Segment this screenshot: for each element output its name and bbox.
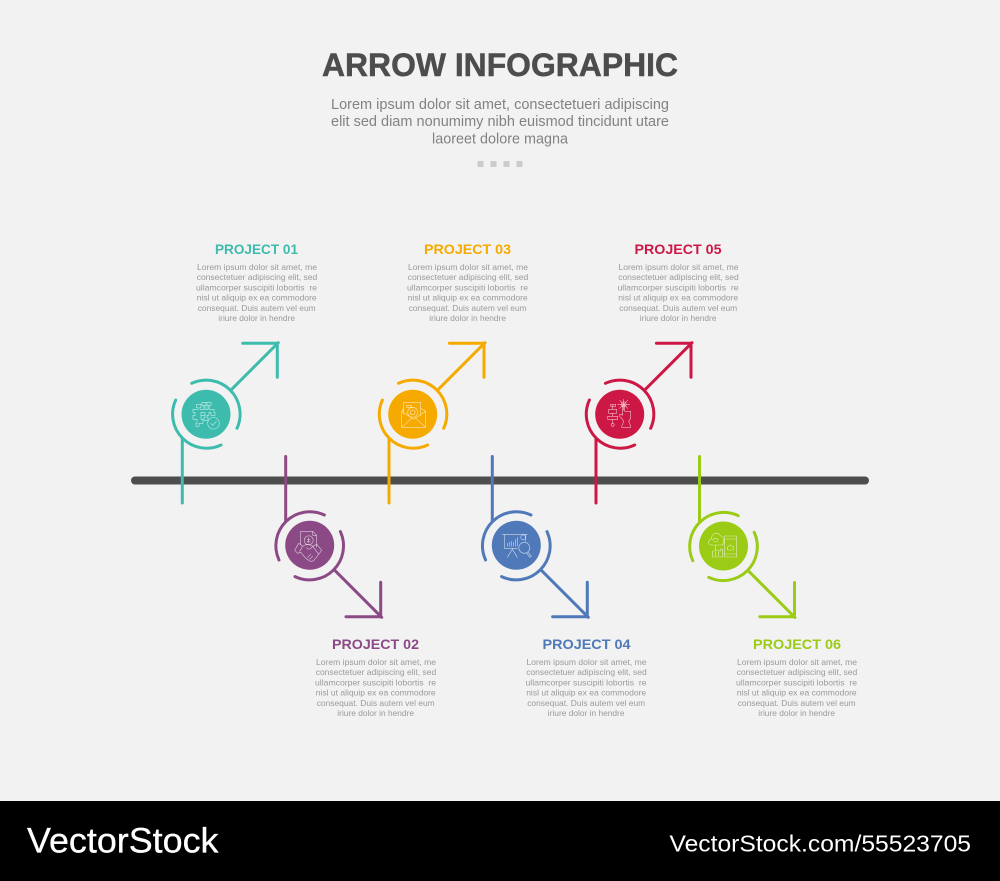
project 05 text block: nisl ut aliquip ex ea commodore: [618, 293, 738, 303]
project 02 marker: [276, 456, 382, 617]
project 03 marker: [379, 343, 485, 503]
footer logo: VectorStock: [27, 822, 219, 861]
subtitle text block: laoreet dolore magna: [432, 130, 569, 148]
project 01 text block: iriure dolor in hendre: [218, 313, 295, 323]
project 04 text block: Lorem ipsum dolor sit amet, me: [526, 657, 647, 667]
project 03 text block: iriure dolor in hendre: [429, 313, 506, 323]
timeline bar: [135, 476, 865, 484]
project 01 text block: consequat. Duis autem vel eum: [198, 303, 316, 313]
project 02 text block: Lorem ipsum dolor sit amet, me: [316, 657, 436, 667]
project 04 text block: consectetuer adipiscing elit, sed: [526, 667, 647, 677]
subtitle text block: [331, 96, 669, 148]
project 05 marker: [586, 343, 692, 503]
panel: project 01: [173, 241, 318, 503]
icon: presentation board with magnifier: [502, 534, 527, 557]
panel: project 05: [586, 241, 739, 503]
project 03 text block: [407, 262, 529, 323]
project 02 text block: nisl ut aliquip ex ea commodore: [316, 688, 436, 698]
project 04 heading: PROJECT 04: [542, 636, 631, 652]
project 05 text block: Lorem ipsum dolor sit amet, me: [618, 262, 739, 272]
project 05 text block: consequat. Duis autem vel eum: [619, 303, 737, 313]
project 06 marker: [690, 456, 795, 618]
project 04 marker: [482, 456, 588, 617]
subtitle text block: elit sed diam nonumimy nibh euismod tincidunt utare: [331, 113, 669, 130]
project 05 text block: iriure dolor in hendre: [640, 313, 717, 323]
panel: project 03: [379, 241, 529, 503]
panel: project 02: [276, 456, 437, 718]
project 05 text block: ullamcorper suscipiti lobortis re: [618, 282, 739, 292]
project 04 text block: iriure dolor in hendre: [548, 708, 625, 718]
panel: project 04: [482, 456, 647, 718]
project 03 text block: Lorem ipsum dolor sit amet, me: [408, 262, 528, 272]
project 05 text block: [618, 262, 739, 323]
project 01 text block: [196, 262, 318, 323]
panel: project 06: [690, 456, 858, 718]
project 04 text block: ullamcorper suscipiti lobortis re: [526, 677, 647, 687]
project 05 heading: PROJECT 05: [634, 241, 722, 257]
project 06 text block: Lorem ipsum dolor sit amet, me: [737, 657, 857, 667]
project 03 text block: nisl ut aliquip ex ea commodore: [408, 293, 528, 303]
project 05 text block: consectetuer adipiscing elit, sed: [618, 272, 739, 282]
icon: handshake with coin: [301, 531, 317, 547]
project 06 text block: consectetuer adipiscing elit, sed: [737, 667, 858, 677]
title: ARROW INFOGRAPHIC: [322, 47, 678, 83]
project 02 text block: consectetuer adipiscing elit, sed: [316, 667, 437, 677]
icon: cloud and device: [708, 533, 724, 550]
icon: hand with flowchart: [608, 404, 631, 427]
project 02 text block: iriure dolor in hendre: [337, 708, 414, 718]
project 06 heading: PROJECT 06: [753, 636, 841, 652]
icon: envelope with gear: [402, 402, 426, 427]
icon: puzzle with check: [193, 402, 215, 426]
project 01 heading: PROJECT 01: [215, 241, 298, 257]
project 06 text block: nisl ut aliquip ex ea commodore: [737, 688, 857, 698]
project 01 text block: Lorem ipsum dolor sit amet, me: [197, 262, 317, 272]
project 02 text block: ullamcorper suscipiti lobortis re: [315, 677, 436, 687]
project 03 heading: PROJECT 03: [424, 241, 511, 257]
project 06 text block: [736, 657, 858, 718]
project 02 text block: [315, 657, 437, 718]
project 01 marker: [173, 343, 278, 503]
project 01 text block: consectetuer adipiscing elit, sed: [197, 272, 318, 282]
subtitle text block: Lorem ipsum dolor sit amet, consectetueri adipiscing: [331, 96, 669, 113]
project 02 heading: PROJECT 02: [332, 636, 419, 652]
project 06 text block: ullamcorper suscipiti lobortis re: [736, 677, 857, 687]
project 01 text block: ullamcorper suscipiti lobortis re: [196, 282, 317, 292]
project 04 text block: [526, 657, 647, 718]
footer band: [0, 801, 1000, 881]
project 06 text block: iriure dolor in hendre: [758, 708, 835, 718]
project 04 text block: consequat. Duis autem vel eum: [527, 698, 645, 708]
project 03 text block: consectetuer adipiscing elit, sed: [408, 272, 529, 282]
project 01 text block: nisl ut aliquip ex ea commodore: [197, 293, 317, 303]
project 06 text block: consequat. Duis autem vel eum: [738, 698, 856, 708]
footer image id: VectorStock.com/55523705: [670, 831, 971, 857]
project 02 text block: consequat. Duis autem vel eum: [317, 698, 435, 708]
project 03 text block: ullamcorper suscipiti lobortis re: [407, 282, 528, 292]
project 03 text block: consequat. Duis autem vel eum: [409, 303, 527, 313]
project 04 text block: nisl ut aliquip ex ea commodore: [526, 688, 646, 698]
title dots: [478, 161, 522, 167]
